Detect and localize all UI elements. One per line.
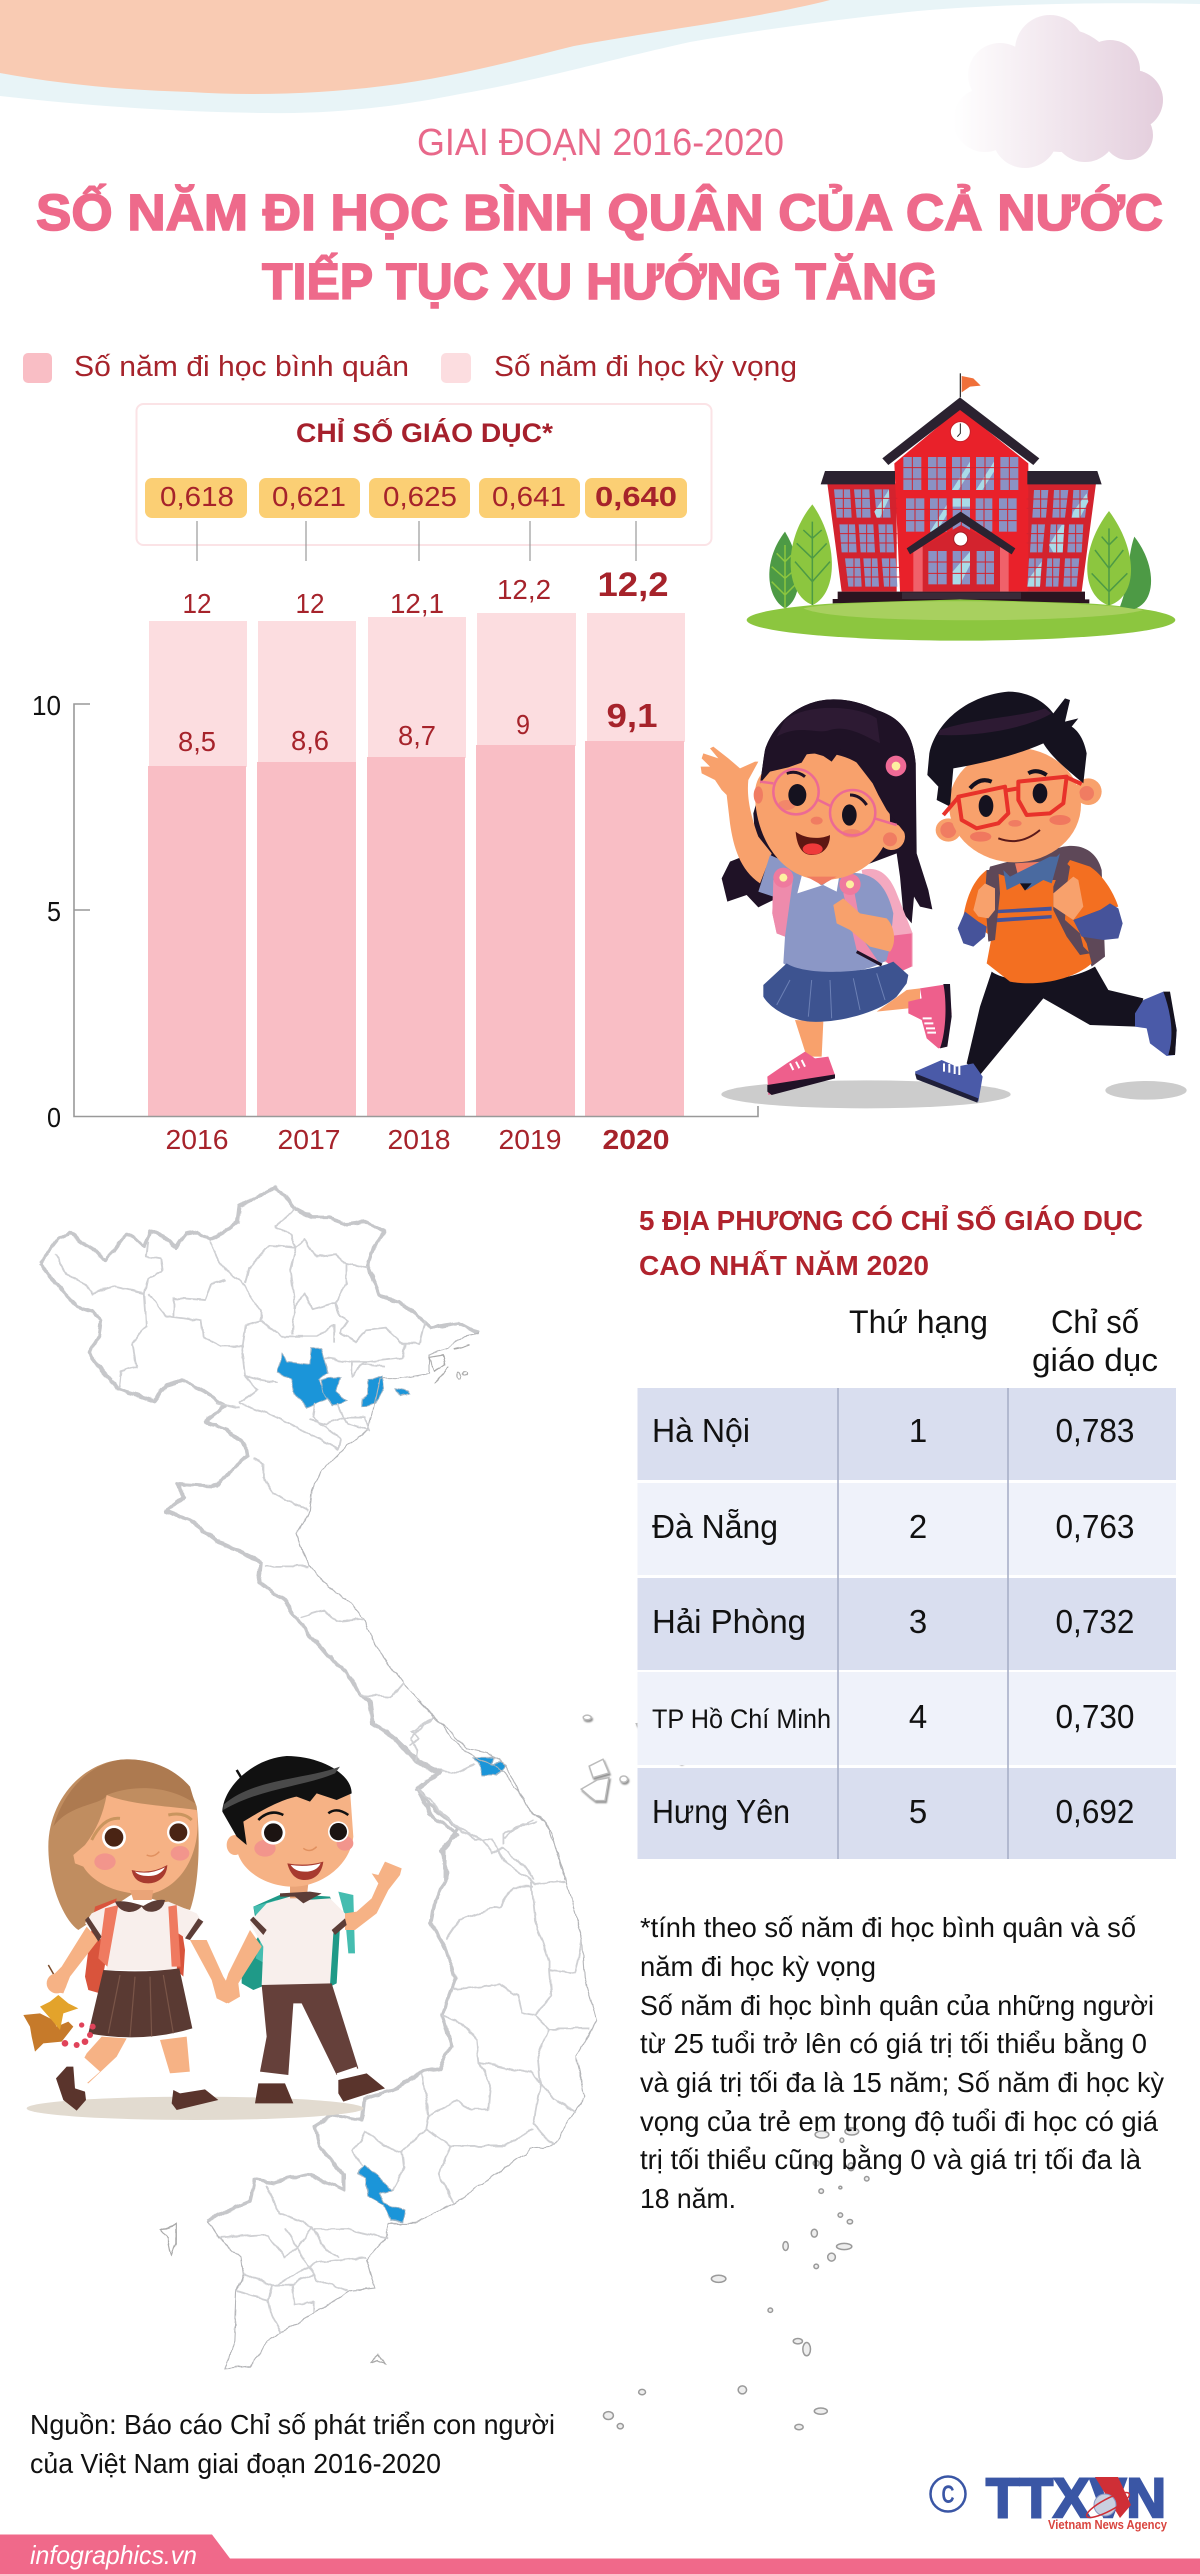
icon: school building	[747, 373, 1175, 641]
table: top five localities: 4	[909, 1698, 927, 1735]
bar chart: 0	[47, 1102, 61, 1133]
bar chart: 12	[182, 588, 212, 619]
panel: education index: 0,621	[272, 481, 346, 512]
footnote: và giá trị tối đa là 15 năm; Số năm đi học kỳ	[640, 2067, 1164, 2098]
table: top five localities: 5	[909, 1793, 927, 1830]
table: top five localities: Hà Nội	[652, 1412, 750, 1449]
legend: Số năm đi học kỳ vọng	[494, 351, 797, 383]
panel: education index: 0,625	[383, 481, 457, 512]
footer bar	[0, 2534, 1200, 2574]
bar chart: 2019	[498, 1124, 562, 1155]
illustration: two students holding hands	[23, 1756, 402, 2120]
header wave: peach	[0, 0, 830, 94]
table: top five localities	[638, 1304, 1176, 1859]
bar chart: 8,5	[178, 726, 216, 757]
footer bar: infographics.vn	[30, 2540, 197, 2570]
table: top five localities: Thứ hạng	[849, 1304, 988, 1340]
bar chart: 2018	[388, 1124, 450, 1155]
girl	[701, 699, 952, 1095]
logo: TTXVN: TTXVN	[986, 2466, 1166, 2529]
bar chart: 12,2	[598, 566, 668, 604]
header wave: light blue	[0, 0, 1200, 113]
table heading: CAO NHẤT NĂM 2020	[639, 1250, 929, 1281]
table: top five localities: Đà Nẵng	[652, 1508, 778, 1545]
footnote: năm đi học kỳ vọng	[640, 1951, 876, 1982]
islands: Truong Sa	[603, 2128, 869, 2430]
source: Nguồn: Báo cáo Chỉ số phát triển con người	[30, 2409, 555, 2440]
islands: Hoang Sa east	[620, 1722, 684, 1814]
title: TIẾP TỤC XU HƯỚNG TĂNG	[262, 252, 937, 310]
bar chart: 2016	[166, 1124, 228, 1155]
title: SỐ NĂM ĐI HỌC BÌNH QUÂN CỦA CẢ NƯỚC	[36, 183, 1163, 241]
table: top five localities: 0,783	[1056, 1412, 1134, 1449]
boy	[915, 692, 1177, 1103]
table: top five localities: 0,763	[1056, 1508, 1134, 1545]
map: Ho Chi Minh City highlight	[357, 2164, 404, 2222]
map: northern and central Vietnam	[40, 1188, 565, 1880]
logo: TTXVN: C	[942, 2481, 954, 2509]
bar chart: 2020	[602, 1124, 670, 1155]
map: highlighted northern provinces	[277, 1348, 506, 1775]
table heading: 5 ĐỊA PHƯƠNG CÓ CHỈ SỐ GIÁO DỤC	[639, 1204, 1143, 1236]
title	[36, 183, 1163, 310]
table: top five localities: Chỉ số	[1051, 1304, 1139, 1340]
footnote: từ 25 tuổi trở lên có giá trị tối thiểu bằng 0	[640, 2028, 1147, 2059]
bar chart: 8,6	[291, 725, 329, 756]
source	[30, 2409, 555, 2479]
bar chart: 8,7	[398, 720, 436, 751]
table: top five localities: Hải Phòng	[652, 1603, 806, 1640]
table: top five localities: giáo dục	[1032, 1342, 1158, 1378]
illustration: two running students	[701, 692, 1187, 1108]
bar chart: 2017	[278, 1124, 340, 1155]
bar chart: 12,1	[390, 588, 444, 619]
panel: education index: 0,618	[160, 481, 234, 512]
table: top five localities: 0,692	[1056, 1793, 1134, 1830]
footnote: 18 năm.	[640, 2183, 736, 2214]
table: top five localities: TP Hồ Chí Minh	[652, 1704, 831, 1734]
legend: Số năm đi học bình quân	[74, 351, 409, 383]
panel: education index: CHỈ SỐ GIÁO DỤC*	[296, 416, 554, 448]
footnote	[640, 1912, 1164, 2214]
table: top five localities: 0,732	[1056, 1603, 1134, 1640]
bar chart: 12,2	[497, 574, 551, 605]
bar chart: 12	[296, 588, 324, 619]
subtitle: GIAI ĐOẠN 2016-2020	[417, 122, 784, 164]
school windows	[834, 457, 1090, 587]
bar chart: 10	[32, 690, 61, 721]
panel: education index	[136, 404, 712, 561]
footnote: vọng của trẻ em trong độ tuổi đi học có giá	[640, 2106, 1158, 2137]
table: top five localities: 0,730	[1056, 1698, 1134, 1735]
table heading	[639, 1204, 1143, 1281]
table: top five localities: 1	[909, 1412, 927, 1449]
islands: Hoang Sa cluster	[581, 1715, 609, 1801]
bar chart: 9,1	[606, 697, 658, 734]
panel: education index: 0,641	[492, 481, 566, 512]
cloud	[953, 15, 1163, 168]
legend	[23, 351, 797, 383]
bar chart: 5	[47, 896, 61, 927]
bar chart: 9	[516, 709, 530, 740]
source: của Việt Nam giai đoạn 2016-2020	[30, 2448, 441, 2479]
footnote: trị tối thiểu cũng bằng 0 và giá trị tối đa là	[640, 2144, 1141, 2175]
bar chart	[32, 566, 758, 1155]
boy waving	[220, 1756, 402, 2103]
logo: TTXVN: Vietnam News Agency	[1048, 2517, 1168, 2532]
footnote: Số năm đi học bình quân của những người	[640, 1990, 1154, 2021]
table: top five localities: 3	[909, 1603, 927, 1640]
table: top five localities: Hưng Yên	[652, 1793, 790, 1830]
footnote: *tính theo số năm đi học bình quân và số	[640, 1912, 1136, 1943]
table: top five localities: 2	[909, 1508, 927, 1545]
girl with leaves	[23, 1759, 235, 2111]
map: southern Vietnam	[160, 1700, 596, 2369]
panel: education index: 0,640	[595, 481, 677, 512]
